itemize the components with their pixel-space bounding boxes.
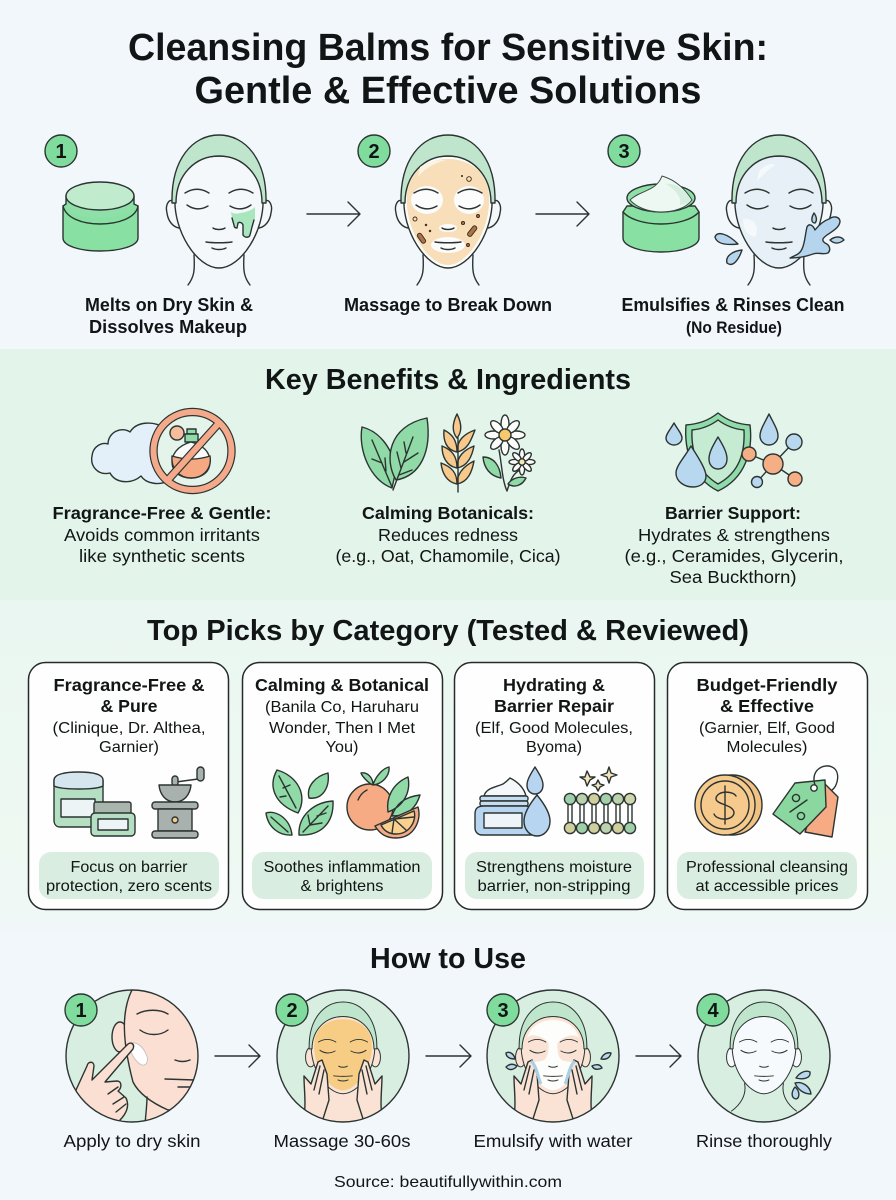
text block (336, 503, 560, 566)
callout: at accessible prices (696, 878, 838, 895)
icon: leaves and orange (266, 767, 420, 838)
step labels (64, 1131, 832, 1151)
panel: fragrance-free benefit (52, 412, 272, 566)
panel: calming botanicals benefit (336, 414, 560, 566)
arrow (536, 202, 589, 226)
text block: Reduces redness (378, 525, 518, 545)
card heading: (Banila Co, Haruharu (265, 699, 419, 716)
card heading: Garnier) (99, 739, 159, 756)
title (128, 27, 768, 112)
card heading: Byoma) (526, 739, 582, 756)
heading: how to use: How to Use (370, 943, 526, 975)
icon: face with balm and impurities (395, 135, 501, 285)
step captions: Melts on Dry Skin & (85, 295, 253, 315)
text block (52, 503, 272, 566)
step labels: Massage 30-60s (274, 1131, 411, 1151)
icon: shield, drops and molecule (666, 413, 802, 491)
step 4: rinse: 4 (707, 1000, 719, 1022)
icon: cream jar and drops (475, 767, 636, 836)
step captions: Massage to Break Down (344, 295, 552, 315)
card heading (255, 675, 429, 756)
card heading: (Elf, Good Molecules, (475, 720, 633, 737)
card heading (52, 675, 206, 756)
arrow (636, 1045, 681, 1067)
step 3 badge (608, 135, 640, 167)
callout (252, 852, 432, 899)
callout: & brightens (300, 878, 384, 895)
card heading: Hydrating & (503, 675, 605, 695)
panel: how to use steps (64, 985, 832, 1151)
text block: Fragrance-Free & Gentle: (52, 503, 272, 523)
card heading: Molecules) (726, 739, 808, 756)
card heading: & Pure (100, 696, 158, 716)
icon: cloud and crossed-out perfume (92, 412, 232, 490)
text block: Avoids common irritants (64, 525, 260, 545)
callout (677, 852, 857, 899)
text block: like synthetic scents (79, 546, 245, 566)
icon: leaves, wheat and daisies (361, 414, 535, 492)
step 2 badge: 2 (368, 141, 380, 163)
text block: Calming Botanicals: (362, 503, 534, 523)
card heading: (Clinique, Dr. Althea, (52, 720, 206, 737)
panel: budget card (668, 662, 868, 910)
card heading (696, 675, 838, 756)
card heading: Wonder, Then I Met (269, 720, 416, 737)
callout: protection, zero scents (46, 878, 212, 895)
callout (465, 852, 644, 899)
card heading: & Effective (720, 696, 814, 716)
card heading: You) (326, 739, 358, 756)
icon: closed green jar (63, 182, 138, 251)
title: Gentle & Effective Solutions (194, 70, 702, 112)
panel: calming card (242, 662, 442, 910)
card heading: (Garnier, Elf, Good (699, 720, 835, 737)
card heading (475, 675, 633, 756)
step 2: massage (276, 990, 409, 1135)
arrow (215, 1045, 260, 1067)
text block: (e.g., Ceramides, Glycerin, (624, 546, 844, 566)
callout: Strengthens moisture (476, 859, 632, 876)
panel: fragrance-free card (28, 662, 228, 910)
callout: barrier, non-stripping (478, 878, 630, 895)
text block: Barrier Support: (665, 503, 801, 523)
step labels: Apply to dry skin (64, 1131, 200, 1151)
step captions: Dissolves Makeup (89, 317, 247, 337)
callout: Soothes inflammation (264, 859, 420, 876)
step captions: Emulsifies & Rinses Clean (622, 295, 844, 315)
icon: open jar with cream (623, 176, 699, 252)
step captions: (No Residue) (686, 318, 782, 337)
panel: barrier support benefit (624, 413, 844, 587)
step 1 badge (45, 135, 77, 167)
panel: three step process (45, 135, 844, 337)
text block (624, 503, 844, 587)
icon: face with melting balm (166, 135, 272, 285)
step labels: Emulsify with water (474, 1131, 633, 1151)
card heading: Budget-Friendly (696, 675, 838, 695)
step 3: emulsify: 3 (497, 1000, 509, 1022)
card heading: Fragrance-Free & (54, 675, 205, 695)
card heading: Barrier Repair (494, 696, 614, 716)
arrow (307, 202, 360, 226)
step 1: apply to dry skin (64, 989, 199, 1123)
step 2: massage: 2 (286, 1000, 298, 1022)
text block: Sea Buckthorn) (670, 567, 796, 587)
step 3: emulsify (487, 990, 619, 1135)
step 2 badge (358, 135, 390, 167)
source: Source: beautifullywithin.com (334, 1174, 562, 1191)
callout (39, 852, 219, 899)
icon: coin and price tag (695, 766, 838, 837)
heading: top picks: Top Picks by Category (Tested & Reviewed) (147, 615, 749, 647)
icon: clean face with water splash (715, 135, 844, 285)
callout: Focus on barrier (70, 859, 188, 876)
step labels: Rinse thoroughly (696, 1131, 832, 1151)
icon: jars and grinder (54, 767, 204, 838)
text block: Hydrates & strengthens (638, 525, 830, 545)
panel: hydrating card (454, 662, 654, 910)
step captions (85, 295, 844, 337)
heading: key benefits: Key Benefits & Ingredients (265, 364, 631, 396)
step 1: apply to dry skin: 1 (75, 1000, 87, 1022)
step 3 badge: 3 (618, 141, 630, 163)
step 4: rinse (697, 990, 830, 1122)
step 1 badge: 1 (55, 141, 67, 163)
callout: Professional cleansing (686, 859, 848, 876)
arrow (426, 1045, 471, 1067)
title: Cleansing Balms for Sensitive Skin: (128, 27, 768, 69)
text block: (e.g., Oat, Chamomile, Cica) (336, 546, 560, 566)
card heading: Calming & Botanical (255, 675, 429, 695)
